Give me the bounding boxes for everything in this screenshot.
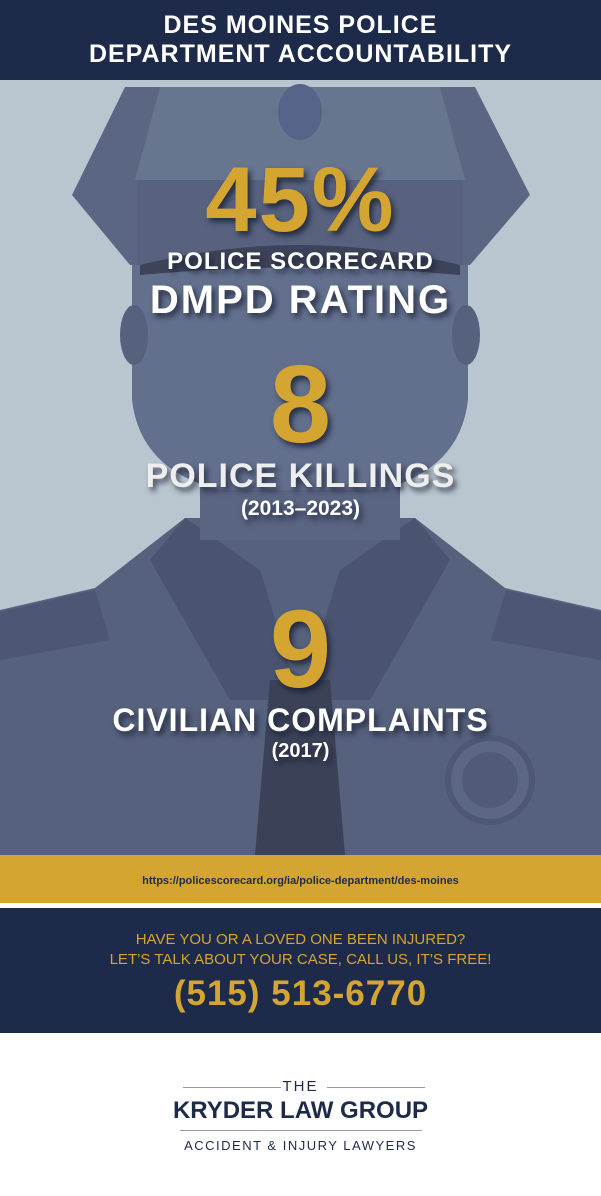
header: DES MOINES POLICE	[164, 11, 437, 39]
illustration: police officer silhouette	[0, 80, 601, 855]
logo	[173, 1078, 428, 1153]
logo: KRYDER LAW GROUP	[173, 1097, 428, 1124]
stat 1: 45%	[205, 149, 396, 251]
tie	[255, 680, 345, 855]
stat 2: 8	[270, 343, 331, 466]
face	[132, 260, 468, 490]
stat 3: 9	[270, 588, 331, 711]
call to action: LET’S TALK ABOUT YOUR CASE, CALL US, IT’S FREE!	[110, 951, 491, 968]
text: (2017)	[272, 740, 329, 762]
text: CIVILIAN COMPLAINTS	[112, 702, 489, 738]
text: DMPD RATING	[150, 278, 451, 322]
text: POLICE SCORECARD	[167, 248, 434, 275]
logo: ACCIDENT & INJURY LAWYERS	[184, 1138, 417, 1153]
source bar	[0, 855, 601, 903]
hat	[72, 87, 530, 265]
body	[0, 518, 601, 855]
header: DEPARTMENT ACCOUNTABILITY	[89, 40, 512, 68]
call to action: (515) 513-6770	[174, 974, 427, 1013]
source bar: https://policescorecard.org/ia/police-department/des-moines	[142, 875, 459, 887]
call to action: HAVE YOU OR A LOVED ONE BEEN INJURED?	[136, 931, 465, 948]
call to action	[0, 908, 601, 1033]
badge	[448, 738, 532, 822]
logo: THE	[282, 1078, 318, 1095]
header	[0, 0, 601, 80]
text: POLICE KILLINGS	[146, 457, 455, 495]
neck	[200, 380, 400, 540]
text: (2013–2023)	[241, 497, 360, 520]
